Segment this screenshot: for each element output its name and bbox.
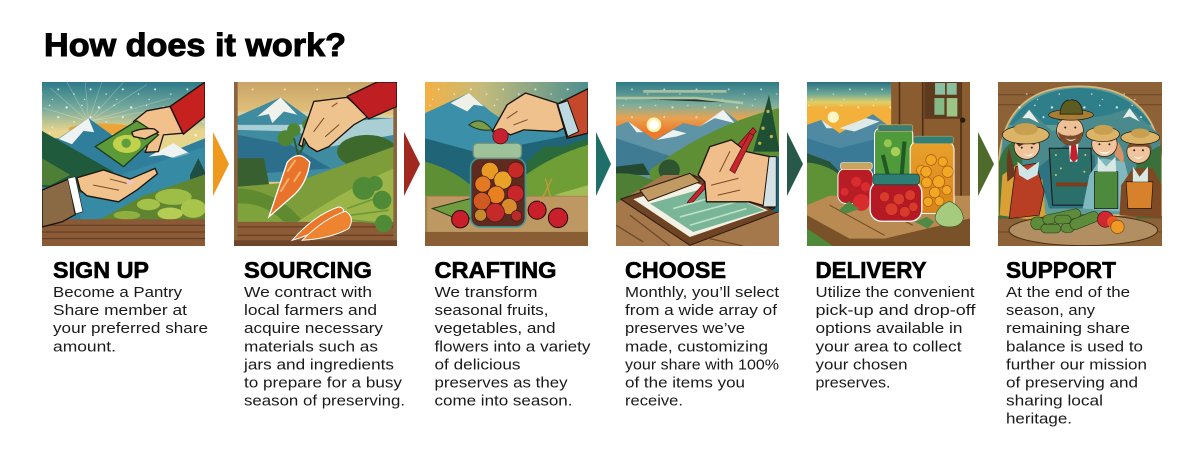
illustration: cherry dropped into a jar — [425, 82, 588, 246]
description: choose: your share with 100% — [625, 356, 779, 373]
description: sourcing: to prepare for a busy — [244, 374, 403, 392]
illustration: hand picking a carrot — [234, 82, 397, 246]
description: support: At the end of the — [1006, 284, 1130, 301]
description: delivery: your chosen — [816, 356, 908, 373]
description: support: balance is used to — [1006, 338, 1143, 355]
description: crafting — [434, 284, 591, 410]
heading: choose: CHOOSE — [625, 257, 726, 283]
description: choose — [625, 284, 780, 410]
heading: sourcing: SOURCING — [244, 257, 372, 283]
illustration: four farmers around a table of produce — [998, 82, 1162, 246]
description: sourcing: acquire necessary — [244, 320, 384, 337]
panel: sign up — [42, 82, 208, 355]
description: crafting: vegetables, and — [434, 320, 556, 337]
description: sourcing: jars and ingredients — [243, 356, 394, 373]
description: support: remaining share — [1006, 320, 1130, 337]
heading: delivery: DELIVERY — [816, 257, 926, 283]
description: choose: from a wide array of — [625, 302, 778, 319]
description: choose: made, customizing — [625, 338, 768, 355]
arrow 1 — [213, 132, 229, 196]
description: sourcing — [243, 284, 405, 410]
panel: crafting — [425, 82, 591, 410]
heading: crafting: CRAFTING — [434, 257, 556, 283]
description: sign up: Share member at — [53, 302, 188, 319]
description: sourcing: We contract with — [244, 284, 372, 301]
description: choose: preserves we’ve — [625, 320, 745, 337]
description: delivery — [816, 284, 976, 392]
description: sign up: Become a Pantry — [53, 284, 183, 301]
panel: sourcing — [234, 82, 405, 410]
illustration: exchanging money over a mountain landscape — [42, 82, 205, 246]
description: support: further our mission — [1006, 356, 1147, 373]
description: support: sharing local — [1006, 393, 1103, 410]
arrow 4 — [787, 132, 803, 196]
description: crafting: flowers into a variety — [434, 338, 591, 355]
description: sourcing: materials such as — [244, 338, 378, 355]
description: sourcing: season of preserving. — [244, 393, 405, 410]
arrow 3 — [596, 132, 611, 196]
description: sign up: amount. — [53, 338, 116, 355]
arrow 5 — [978, 132, 994, 196]
description: crafting: preserves as they — [434, 374, 568, 392]
arrow 2 — [404, 132, 420, 196]
description: sourcing: local farmers and — [244, 302, 377, 319]
description: sign up: your preferred share — [53, 320, 208, 337]
description: crafting: seasonal fruits, — [434, 302, 548, 319]
panel: choose — [616, 82, 780, 410]
description: choose: Monthly, you’ll select — [625, 284, 780, 301]
description: crafting: come into season. — [434, 393, 572, 410]
description: delivery: your area to collect — [816, 338, 962, 355]
description: support — [1006, 284, 1147, 428]
description: delivery: Utilize the convenient — [816, 284, 975, 301]
description: crafting: of delicious — [434, 356, 520, 373]
description: sign up — [53, 284, 208, 355]
description: support: heritage. — [1006, 411, 1072, 428]
heading: support: SUPPORT — [1006, 257, 1116, 283]
description: choose: of the items you — [625, 374, 745, 392]
illustration: preserve jars on a porch — [807, 82, 970, 246]
heading: sign up: SIGN UP — [53, 257, 149, 283]
illustration: hand filling in an order form — [616, 82, 779, 246]
description: support: season, any — [1006, 302, 1096, 319]
panel: delivery — [807, 82, 976, 392]
description: delivery: preserves. — [816, 374, 890, 392]
description: crafting: We transform — [434, 284, 538, 301]
description: delivery: pick-up and drop-off — [816, 302, 976, 319]
panel: support — [998, 82, 1162, 428]
description: support: of preserving and — [1006, 374, 1138, 392]
description: delivery: options available in — [816, 320, 962, 337]
title: How does it work? — [44, 27, 346, 63]
description: choose: receive. — [625, 393, 683, 410]
